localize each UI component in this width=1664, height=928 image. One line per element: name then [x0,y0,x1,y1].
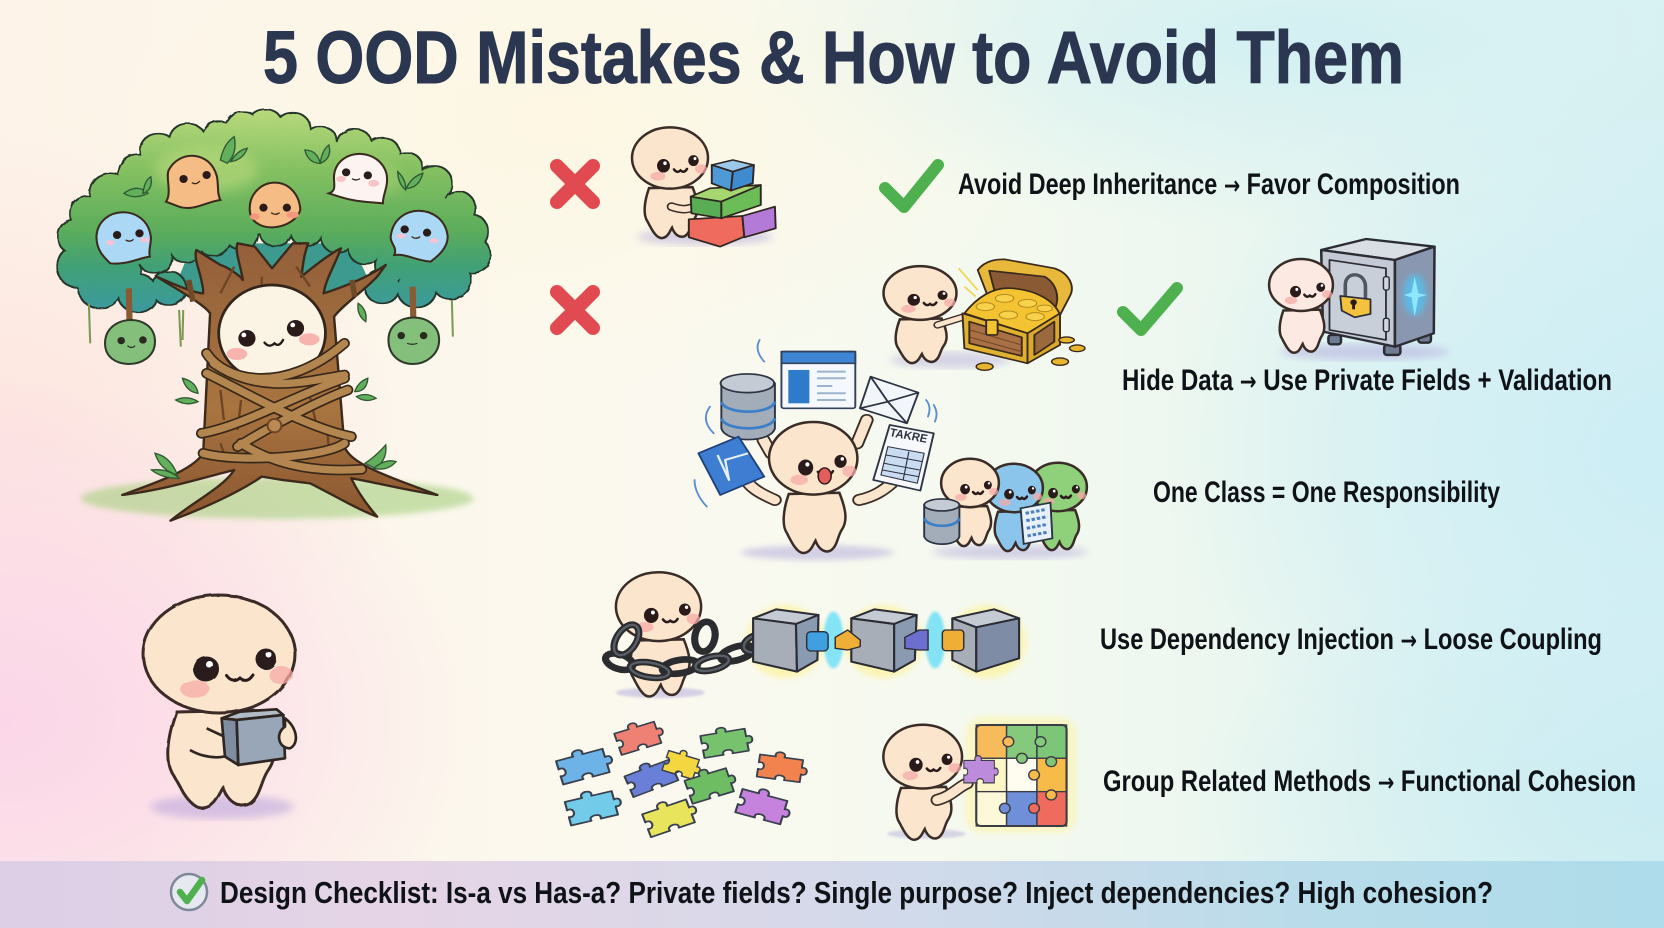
illustration: character guarding locked safe [1269,239,1450,360]
illustration: chained character with injected cubes [603,572,1026,698]
tree face [219,285,325,382]
shadow [1280,344,1450,360]
tangled vines around trunk [201,343,362,470]
illustration: tree with tangled trunk and creatures [58,110,490,521]
illustration: character with open treasure chest [884,259,1085,370]
shadow [637,229,773,245]
text: one class: One Class = One Responsibility [1153,476,1500,509]
green check 2 [1123,288,1177,330]
character [1269,259,1333,353]
blue glow on safe [1403,274,1427,317]
bar background [0,861,1664,928]
shadow [150,795,294,819]
text: avoid deep inheritance: Avoid Deep Inheritance → Favor Composition [958,168,1460,201]
creature: orange center [250,183,300,227]
grey block and arms [190,709,296,765]
reaching arm [937,783,967,800]
red cross 1 [557,166,593,202]
cyan piece [564,785,624,826]
cyan sparks [823,612,945,668]
purple puzzle piece [964,756,998,783]
completed puzzle grid [976,725,1067,826]
shadowed canopy behind branches [172,243,372,297]
illustration: character holding a grey block [143,595,296,819]
creature: hanging green left [105,288,155,364]
cube 3 [952,609,1019,672]
creature: orange top left [166,156,220,208]
table document [873,425,934,491]
database cylinder [721,374,775,440]
shadow [616,687,705,698]
red cross 2 [557,292,593,328]
character [632,127,708,238]
cube 1 [753,609,818,672]
trunk and roots [122,243,437,521]
creature: hanging green right [388,287,439,364]
green piece [699,723,754,758]
green piece 2 [683,762,739,804]
green teammate [1029,463,1087,550]
treasure chest [938,259,1085,370]
bark grain [220,267,329,453]
yellow piece [662,746,705,781]
green check 1 [885,165,938,207]
plug connectors [807,630,964,651]
shadow [887,829,966,839]
yellow glow [966,717,1076,833]
arms [744,420,892,500]
cube 2 [851,609,917,672]
creature: blue right [391,211,448,262]
illustration: character stacking blocks [632,127,776,247]
creature: blue left [96,212,151,264]
cream teammate [941,459,999,546]
open mouth [818,468,831,484]
stacked coloured blocks [672,160,776,247]
blue teammate [985,464,1043,551]
leaves and grass tufts [124,137,423,478]
title: 5 OOD Mistakes & How to Avoid Them [263,16,1404,99]
illustration: character completing puzzle [883,717,1076,840]
lime piece [640,793,700,837]
character [143,595,295,808]
branch bands [189,280,355,302]
illustration: overloaded character juggling tasks [695,340,937,560]
browser window [781,352,855,408]
orange piece [757,750,809,783]
table document: TAKRE [888,427,929,446]
character [769,422,857,553]
motion lines [695,340,937,507]
heavy chain [603,620,773,680]
trunk knot [268,419,281,432]
footer checklist bar [0,861,1664,928]
canopy highlights [155,147,403,197]
character [883,725,962,840]
purple piece [735,784,794,826]
illustration: three teammates sharing tasks [924,459,1088,559]
blue diagram card [698,437,764,495]
text: dependency injection: Use Dependency Injection → Loose Coupling [1100,623,1602,656]
salmon piece [613,716,666,755]
icon: check badge [171,874,207,910]
shadow [740,545,894,560]
shadow [932,545,1088,559]
illustration: scattered puzzle pieces [555,716,809,837]
ground grass [81,478,474,519]
shadow [890,352,1010,368]
character [616,572,701,697]
creature: white [329,154,387,203]
blue piece [555,742,615,785]
safe with padlock [1321,239,1435,355]
indigo piece [623,753,684,797]
envelope [860,377,918,423]
character [884,266,956,363]
tree canopy [58,110,490,312]
hanging vines [89,300,453,347]
yellow glow [746,605,1026,678]
held database and document [924,499,1052,544]
